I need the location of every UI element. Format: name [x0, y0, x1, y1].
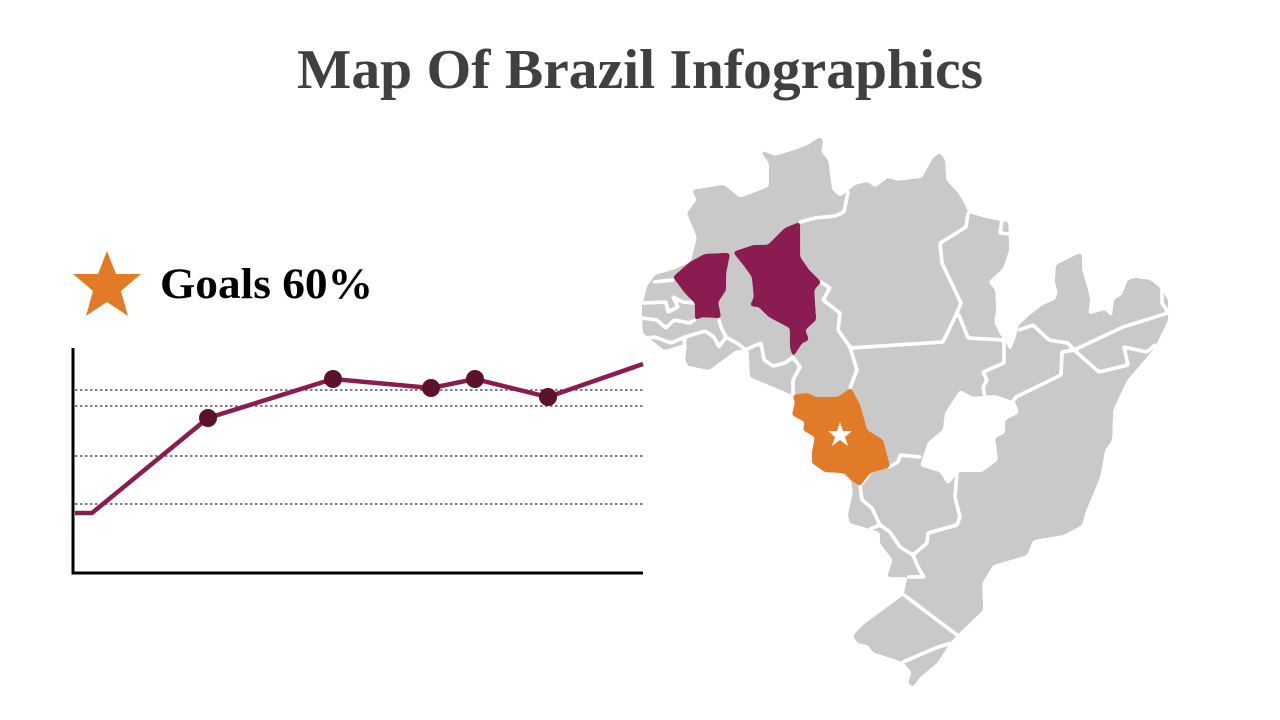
white central state — [920, 390, 1019, 485]
data line — [75, 364, 643, 513]
goal label — [73, 251, 373, 316]
data points — [199, 370, 557, 427]
icon: orange star — [73, 251, 141, 316]
state borders — [642, 192, 1168, 662]
purple state central — [733, 222, 821, 357]
goal text: Goals 60% — [160, 261, 373, 308]
icon: white star — [828, 422, 852, 446]
purple state west — [673, 253, 730, 320]
map of Brazil — [642, 137, 1168, 687]
title: Map Of Brazil Infographics — [297, 39, 983, 101]
line chart — [73, 348, 643, 573]
orange highlighted state — [792, 388, 890, 486]
map silhouette — [642, 137, 1168, 687]
